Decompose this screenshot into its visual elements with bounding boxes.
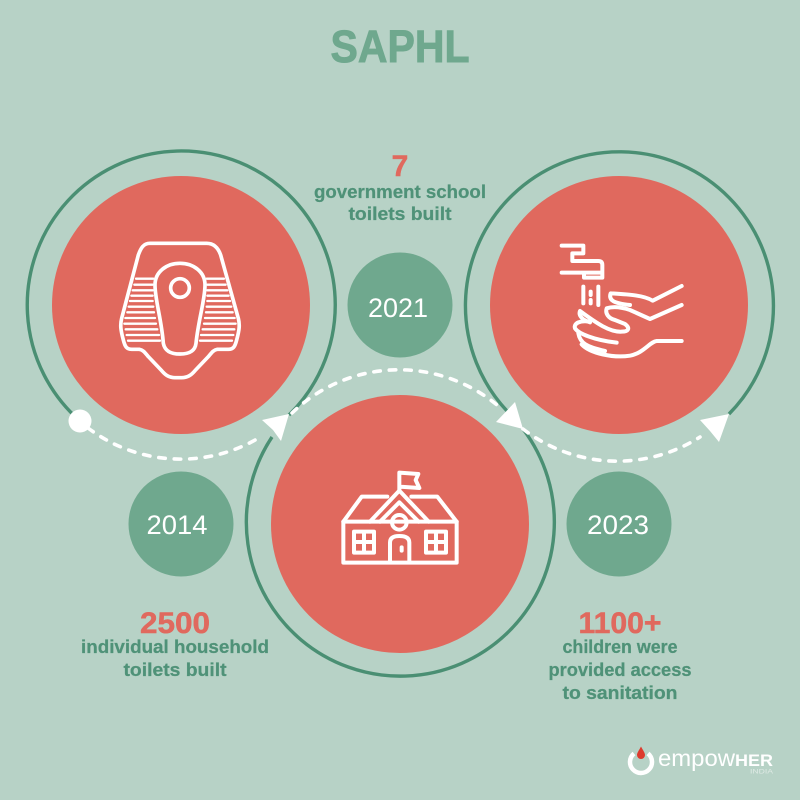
title: SAPHL	[330, 21, 470, 72]
year badge 2023: 2023	[587, 510, 649, 540]
year badge 2021: 2021	[368, 293, 428, 323]
stat: 1100+ children provided access to sanitation: children were	[562, 637, 678, 657]
panel: 2014 coral circle with toilet icon	[52, 176, 310, 434]
stat: 1100+ children provided access to sanitation: to sanitation	[562, 683, 678, 703]
year badge 2023	[566, 472, 672, 576]
arrow: to 2023	[496, 402, 523, 429]
stat: 2500 individual household toilets built: toilets built	[124, 660, 226, 680]
timeline: dashed connectors	[88, 370, 700, 461]
year badge 2021	[348, 252, 452, 358]
stat: 7 government school toilets built: government school	[314, 182, 486, 202]
logo: empowHER India: empow	[658, 745, 735, 771]
arrow: to 2021	[262, 414, 289, 441]
stat: 1100+ children provided access to sanitation: 1100+	[578, 607, 662, 640]
stat: 7 government school toilets built	[314, 150, 486, 224]
icon: squat toilet	[121, 243, 239, 378]
stat: 2500 individual household toilets built: individual household	[81, 637, 269, 657]
logo: empowHER India: INDIA	[750, 770, 773, 776]
stat: 7 government school toilets built: toilets built	[348, 204, 452, 224]
panel: 2023 coral circle with handwashing icon	[490, 176, 748, 434]
stat: 1100+ children provided access to sanitation: provided access	[548, 660, 692, 680]
timeline: solid rings	[27, 151, 773, 676]
stat: 2500 individual household toilets built	[81, 607, 269, 680]
panel: 2021 coral circle with school icon	[271, 395, 529, 653]
stat: 1100+ children provided access to sanitation	[548, 607, 692, 703]
logo: empowHER India	[630, 745, 773, 776]
logo: empowHER India: HER	[735, 751, 773, 770]
year badge 2014: 2014	[146, 510, 208, 540]
icon: hands washing under tap	[562, 246, 682, 356]
arrow: timeline end	[700, 414, 729, 442]
icon: school building	[343, 473, 457, 563]
timeline start dot	[68, 410, 92, 432]
year badge 2014	[128, 472, 234, 576]
stat: 2500 individual household toilets built: 2500	[140, 607, 210, 640]
stat: 7 government school toilets built: 7	[392, 150, 408, 183]
